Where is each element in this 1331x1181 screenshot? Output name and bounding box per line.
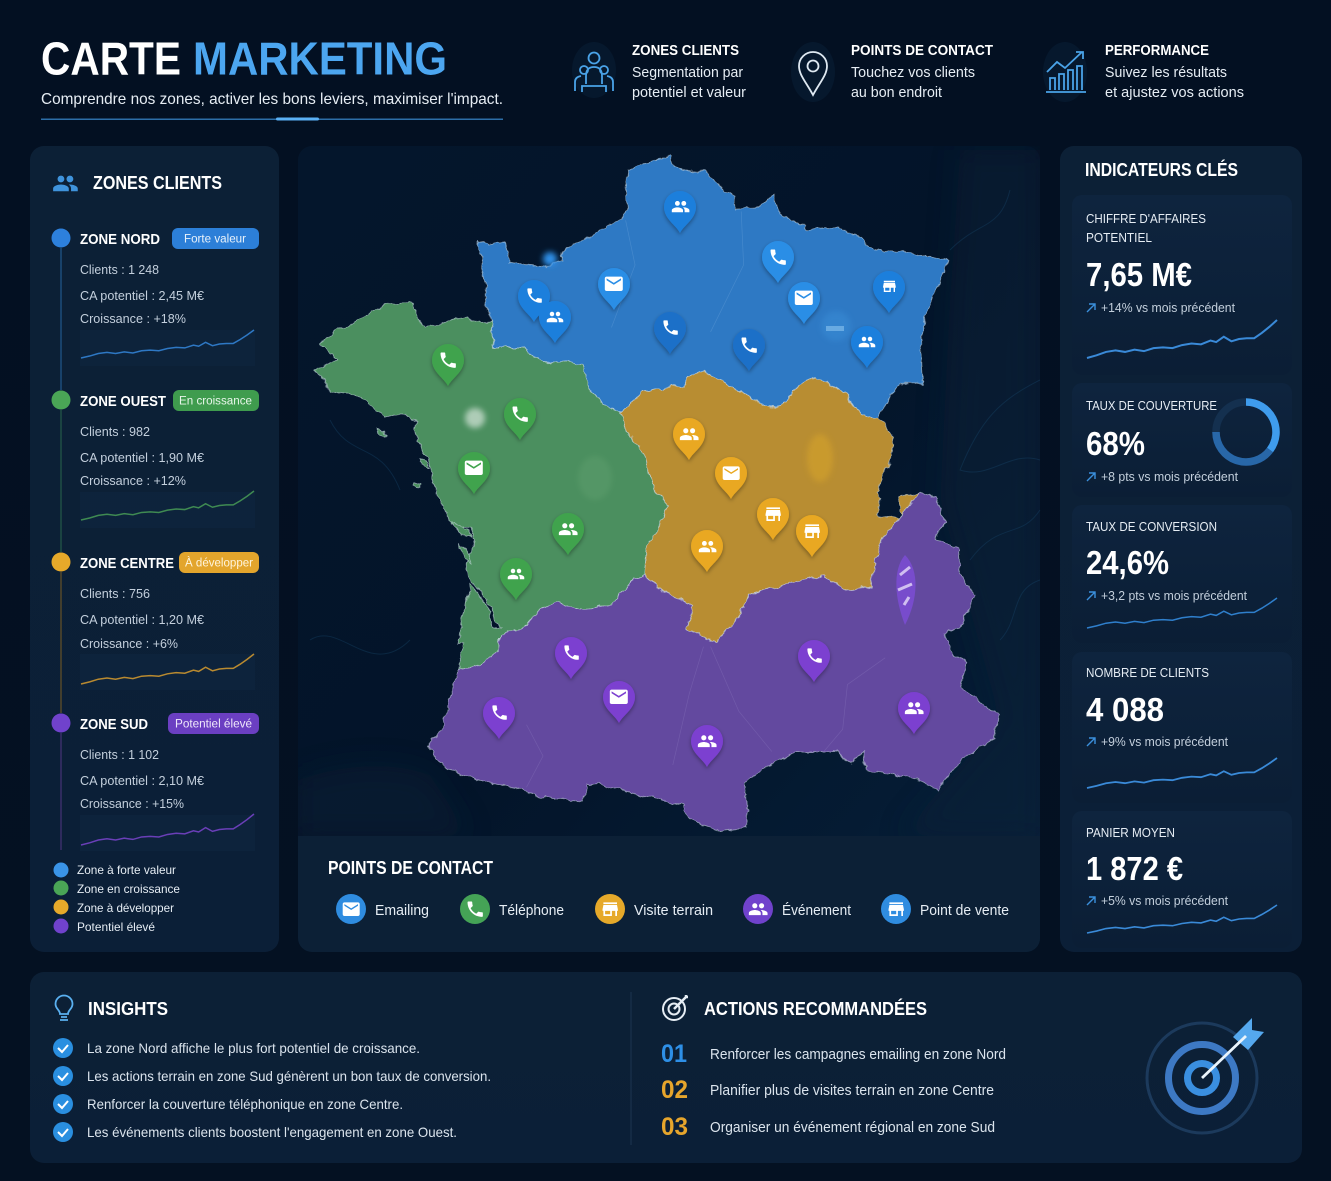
icon: people	[572, 42, 616, 98]
zone nord: Croissance : +18%	[80, 312, 186, 326]
pin: email	[458, 452, 490, 494]
contact: emailing	[336, 894, 429, 924]
zone sud: Clients : 1 102	[80, 748, 159, 762]
zone centre: CA potentiel : 1,20 M€	[80, 613, 204, 627]
kpi: taux de couverture: TAUX DE COUVERTURE	[1086, 398, 1217, 413]
insights list: Les événements clients boostent l'engagement en zone Ouest.	[87, 1124, 457, 1140]
region: sud	[427, 493, 998, 832]
header item: zones clients: potentiel et valeur	[632, 85, 746, 101]
zone sud	[52, 713, 259, 851]
header item: zones clients: ZONES CLIENTS	[632, 43, 739, 59]
heading: points de contact: POINTS DE CONTACT	[328, 858, 493, 878]
contact: telephone	[460, 894, 564, 924]
zone nord: Clients : 1 248	[80, 263, 159, 277]
subtitle: Comprendre nos zones, activer les bons leviers, maximiser l'impact.	[41, 91, 503, 108]
kpi: chiffre d'affaires: CHIFFRE D'AFFAIRES	[1086, 211, 1206, 226]
pin: phone	[483, 697, 515, 739]
zone nord: CA potentiel : 2,45 M€	[80, 289, 204, 303]
heading: insights: INSIGHTS	[88, 999, 168, 1019]
pin: email	[603, 681, 635, 723]
pin: phone	[691, 530, 723, 572]
icon: target small	[663, 995, 688, 1020]
action 03: 03	[661, 1113, 688, 1141]
header item: performance: et ajustez vos actions	[1105, 85, 1244, 101]
zone sud: ZONE SUD	[80, 716, 148, 733]
pin: event	[898, 692, 930, 734]
pin: event	[552, 513, 584, 555]
zone nord: ZONE NORD	[80, 231, 160, 248]
panel: map	[298, 146, 1040, 952]
heading: indicateurs cles: INDICATEURS CLÉS	[1085, 159, 1238, 180]
zone nord	[52, 228, 259, 366]
zone sud: CA potentiel : 2,10 M€	[80, 774, 204, 788]
action 01: 01	[661, 1040, 687, 1068]
pin: north person	[664, 191, 696, 233]
zones legend	[54, 862, 180, 934]
heading: zones clients: ZONES CLIENTS	[93, 173, 222, 193]
heading: actions recommandees: ACTIONS RECOMMANDÉES	[704, 998, 927, 1019]
zone ouest: En croissance	[179, 396, 252, 408]
faint rivers	[310, 190, 1040, 654]
header item: performance: Suivez les résultats	[1105, 65, 1227, 81]
insights list: Les actions terrain en zone Sud génèrent un bon taux de conversion.	[87, 1068, 491, 1084]
zone ouest: CA potentiel : 1,90 M€	[80, 451, 204, 465]
inner region veins	[527, 211, 885, 787]
kpi: panier moyen	[1072, 811, 1292, 948]
header item: performance: PERFORMANCE	[1105, 43, 1209, 59]
kpi: chiffre d'affaires: 7,65 M€	[1086, 256, 1192, 293]
pin: phone	[555, 637, 587, 679]
contact: point de vente	[881, 894, 1009, 924]
pin: phone	[504, 398, 536, 440]
zone centre: ZONE CENTRE	[80, 555, 174, 572]
zone centre: À développer	[185, 556, 253, 570]
action 01: Renforcer les campagnes emailing en zone Nord	[710, 1047, 1006, 1063]
zone centre: Croissance : +6%	[80, 637, 178, 651]
kpi: panier moyen: +5% vs mois précédent	[1101, 894, 1229, 908]
zones legend: Zone en croissance	[77, 882, 180, 896]
neighbouring land background	[298, 150, 1040, 836]
zone ouest	[52, 390, 259, 528]
pin: event	[539, 301, 571, 343]
pins: nord	[518, 191, 905, 371]
pin: phone	[654, 312, 686, 354]
insights list: La zone Nord affiche le plus fort potentiel de croissance.	[87, 1040, 420, 1056]
zones legend: Zone à forte valeur	[77, 863, 176, 877]
kpi: taux de conversion: 24,6%	[1086, 544, 1169, 581]
panel: insights and actions	[30, 972, 1302, 1163]
title: MARKETING	[193, 32, 447, 84]
title underline	[41, 118, 503, 120]
panel: indicateurs cles	[1060, 146, 1302, 952]
zone centre: Clients : 756	[80, 587, 150, 601]
kpi: taux de conversion: TAUX DE CONVERSION	[1086, 519, 1217, 534]
title: CARTE	[41, 32, 181, 84]
pin: phone	[798, 640, 830, 682]
action 02	[661, 1076, 994, 1104]
ghost marks	[465, 252, 916, 625]
kpi: taux de couverture: +8 pts vs mois précédent	[1101, 470, 1239, 484]
kpi: chiffre d'affaires	[1072, 195, 1292, 375]
kpi: taux de couverture: 68%	[1086, 425, 1145, 462]
action 03	[661, 1113, 995, 1141]
insights list	[53, 1038, 491, 1142]
action 01	[661, 1040, 1006, 1068]
contact: visite terrain: Visite terrain	[634, 902, 713, 919]
region: ouest	[317, 303, 668, 671]
action 02: Planifier plus de visites terrain en zone Centre	[710, 1083, 994, 1099]
zones legend: Zone à développer	[77, 901, 174, 915]
zone centre	[52, 552, 259, 690]
pin: phone	[432, 344, 464, 386]
kpi: taux de conversion: +3,2 pts vs mois précédent	[1101, 589, 1248, 603]
pins: sud	[483, 637, 930, 767]
insights list: Renforcer la couverture téléphonique en zone Centre.	[87, 1096, 403, 1112]
pin: email	[788, 282, 820, 324]
pin: store	[796, 515, 828, 557]
kpi: panier moyen: PANIER MOYEN	[1086, 825, 1175, 840]
pin: event	[851, 326, 883, 368]
points de contact strip	[298, 836, 1040, 952]
header item: zones clients: Segmentation par	[632, 65, 743, 81]
header item: points de contact: au bon endroit	[851, 85, 942, 101]
pin: email	[715, 457, 747, 499]
pin: email	[598, 268, 630, 310]
region: nord	[477, 156, 949, 419]
action 03: Organiser un événement régional en zone Sud	[710, 1120, 995, 1136]
zone sud: Croissance : +15%	[80, 797, 184, 811]
pin: phone	[500, 558, 532, 600]
zones legend: Potentiel élevé	[77, 920, 155, 934]
donut chart 68%	[1216, 402, 1276, 462]
pin: event	[691, 725, 723, 767]
kpi: chiffre d'affaires: POTENTIEL	[1086, 230, 1152, 245]
header item: points de contact	[791, 42, 993, 102]
action 02: 02	[661, 1076, 688, 1104]
pins: ouest	[432, 344, 584, 600]
kpi: nombre de clients	[1072, 652, 1292, 803]
kpi: taux de conversion	[1072, 505, 1292, 643]
contact: visite terrain	[595, 894, 713, 924]
header item: zones clients	[572, 42, 746, 101]
contact: telephone: Téléphone	[499, 902, 564, 919]
kpi: panier moyen: 1 872 €	[1086, 850, 1183, 887]
contact: point de vente: Point de vente	[920, 902, 1009, 919]
kpi: chiffre d'affaires: +14% vs mois précédent	[1101, 301, 1236, 315]
timeline connector lines	[60, 248, 62, 850]
icon: location pin	[791, 42, 835, 102]
pin: phone	[518, 280, 550, 322]
icon: zone clients people	[53, 176, 78, 191]
kpi: nombre de clients: 4 088	[1086, 691, 1164, 728]
kpi: nombre de clients: +9% vs mois précédent	[1101, 735, 1229, 749]
zone nord: Forte valeur	[184, 234, 246, 246]
contact: evenement	[743, 894, 852, 924]
kpi: nombre de clients: NOMBRE DE CLIENTS	[1086, 665, 1209, 680]
zone ouest: Croissance : +12%	[80, 474, 186, 488]
icon: target with arrow	[1147, 1018, 1264, 1133]
panel: zones clients	[30, 146, 279, 952]
header item: performance	[1043, 42, 1244, 102]
contact: emailing: Emailing	[375, 902, 429, 919]
france map	[317, 156, 998, 832]
pin: phone	[762, 241, 794, 283]
islands	[378, 428, 472, 564]
pins: centre	[673, 418, 828, 572]
pin: person	[673, 418, 705, 460]
zone sud: Potentiel élevé	[175, 718, 252, 730]
icon: growth chart	[1043, 42, 1087, 102]
contact: evenement: Événement	[782, 902, 852, 919]
kpi: taux de couverture	[1072, 383, 1292, 497]
header item: points de contact: Touchez vos clients	[851, 65, 975, 81]
pin: store	[757, 498, 789, 540]
header item: points de contact: POINTS DE CONTACT	[851, 43, 993, 59]
region: centre	[621, 371, 918, 642]
pin: store	[873, 271, 905, 313]
divider	[630, 992, 632, 1145]
title	[41, 32, 447, 84]
pin: phone	[733, 329, 765, 371]
zone ouest: Clients : 982	[80, 425, 150, 439]
zone ouest: ZONE OUEST	[80, 393, 166, 410]
icon: light bulb	[56, 996, 72, 1020]
